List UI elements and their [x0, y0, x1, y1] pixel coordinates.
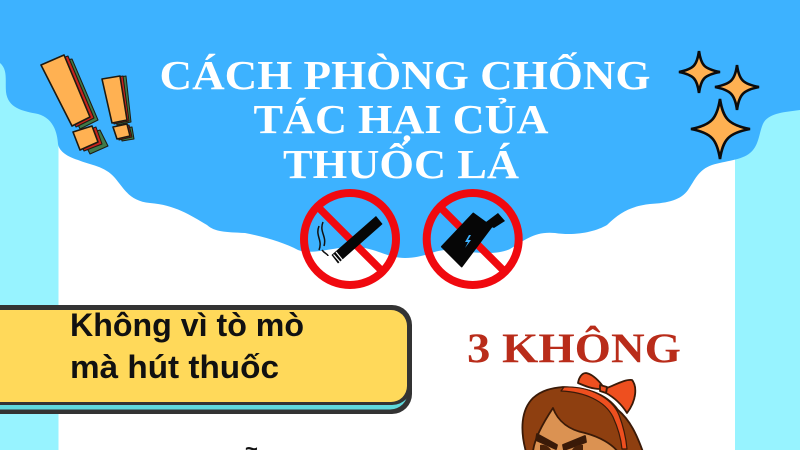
- panel: yellow callout box: [0, 305, 412, 414]
- callout text: [70, 307, 304, 385]
- callout text: Không vì tò mò: [70, 307, 304, 343]
- icon: no smoking sign: [304, 193, 396, 285]
- title: THUỐC LÁ: [283, 140, 519, 187]
- title: CÁCH PHÒNG CHỐNG: [160, 51, 650, 98]
- heading: 3 không: 3 KHÔNG: [467, 324, 681, 372]
- panel: blue cloud header: [0, 0, 800, 258]
- callout text: mà hút thuốc: [70, 349, 279, 385]
- icon: sparkle stars: [679, 51, 759, 159]
- title: TÁC HẠI CỦA: [254, 96, 549, 142]
- icon: no vaping sign: [427, 193, 519, 285]
- panel: white centre sheet: [58, 100, 735, 450]
- title: [160, 51, 650, 187]
- illustration: angry girl: [522, 373, 643, 450]
- icon: exclamation marks: [41, 55, 134, 154]
